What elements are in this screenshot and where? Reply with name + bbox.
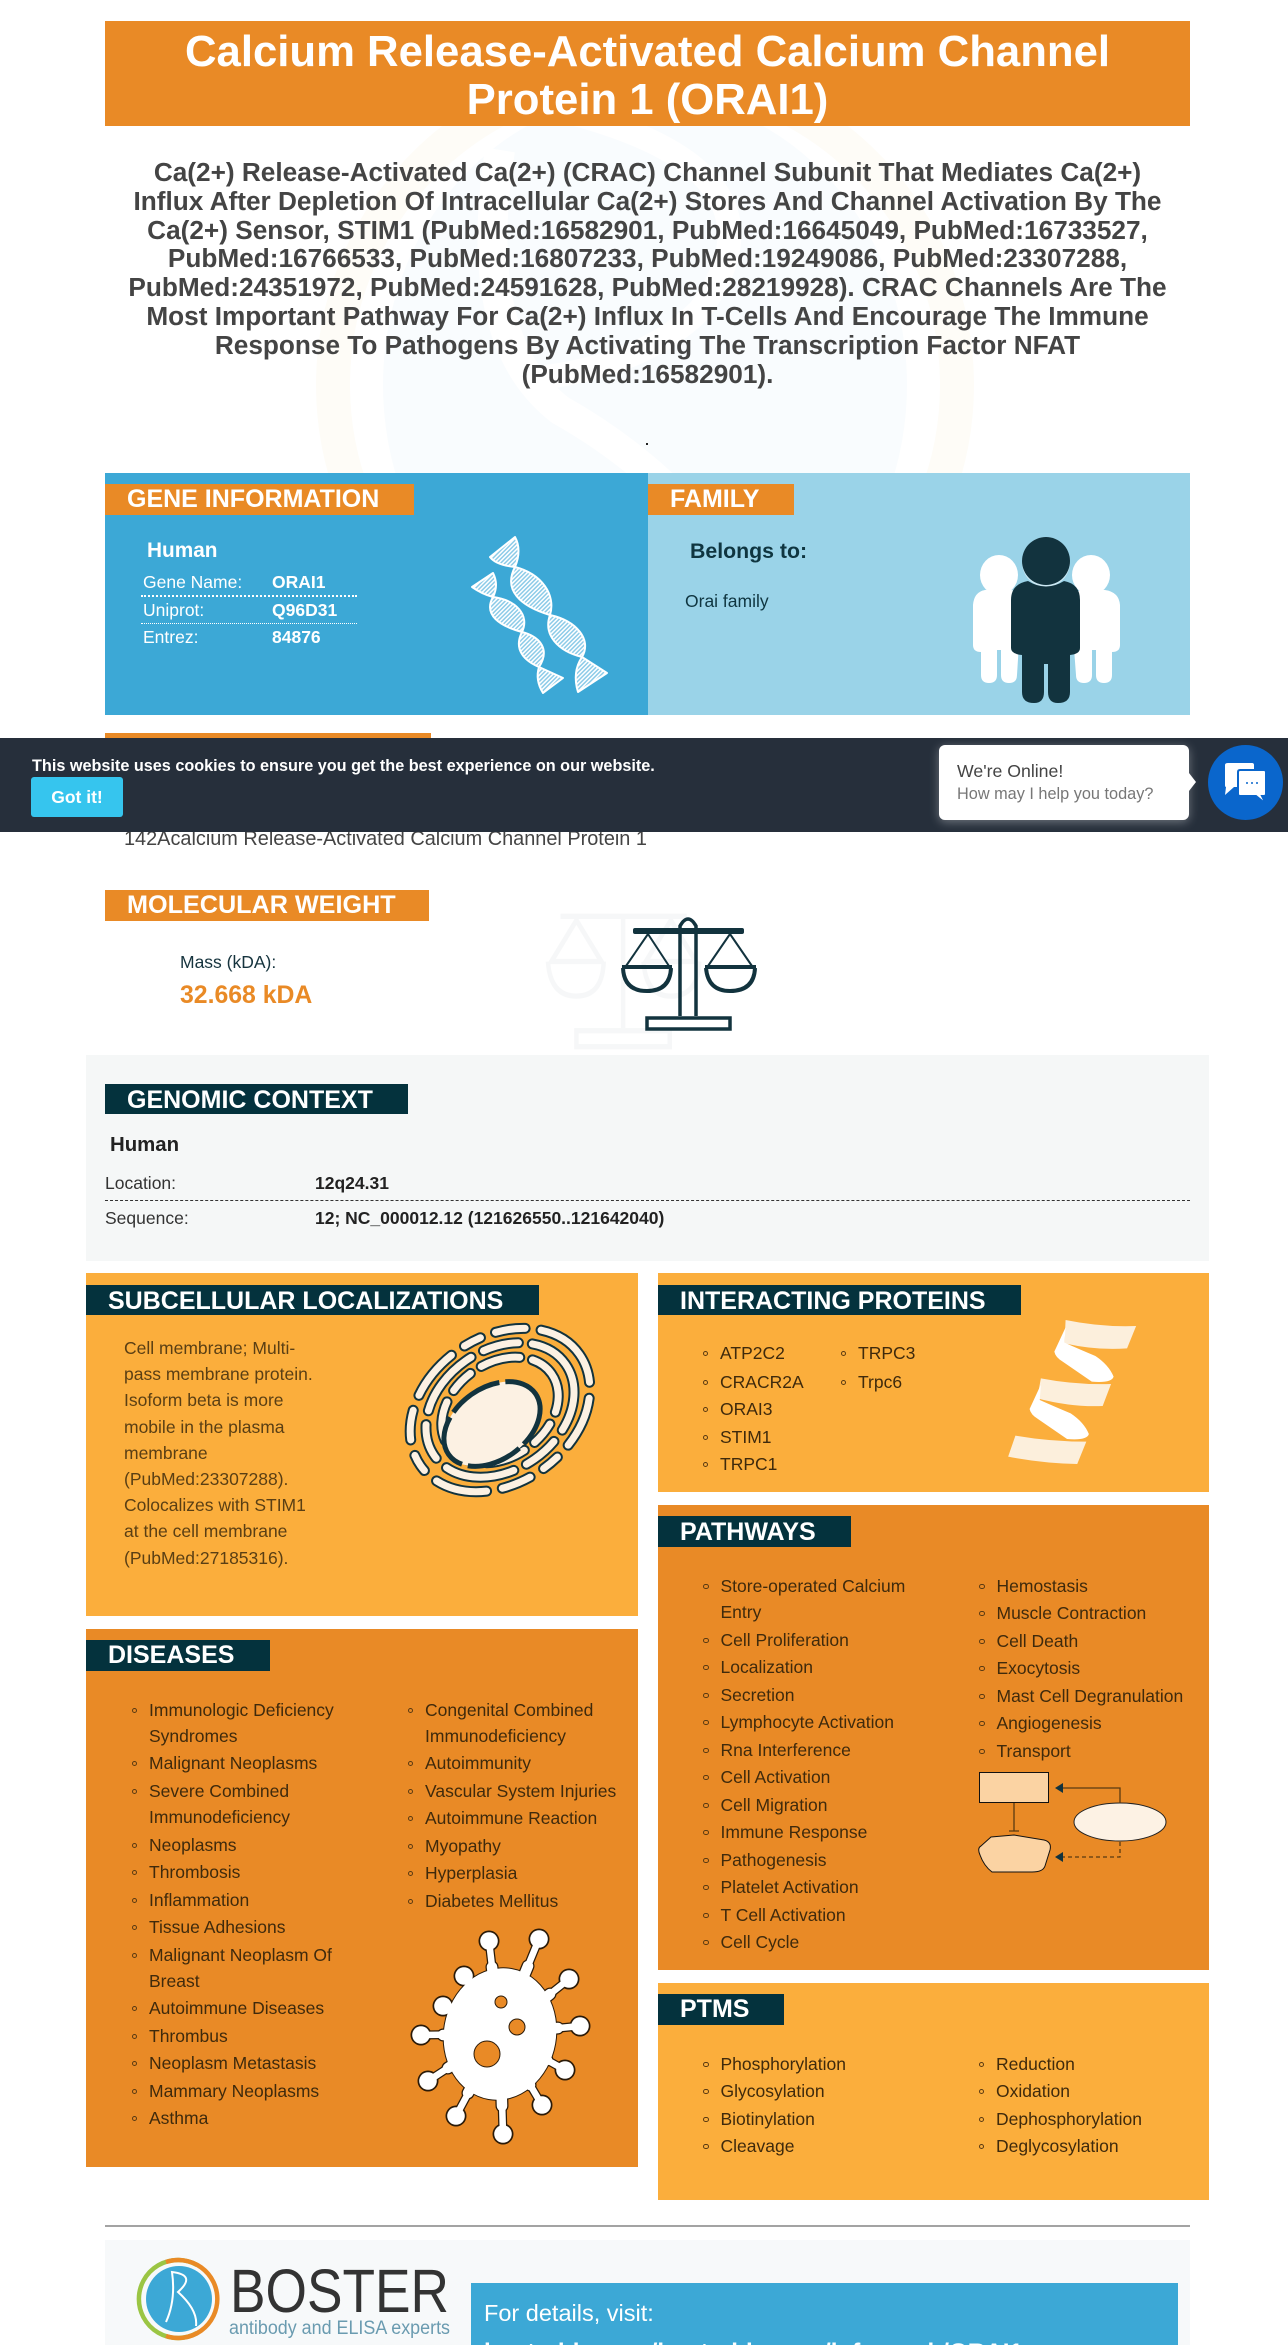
list column 1: Asthma <box>149 2108 208 2128</box>
list column 2: Autoimmune Reaction <box>425 1808 597 1828</box>
list column 2: Cell Death <box>996 1631 1078 1651</box>
list column 2: Oxidation <box>996 2081 1070 2101</box>
uniprot row: Q96D31 <box>272 600 337 620</box>
cookie bar <box>0 738 1288 832</box>
heading: gene information: GENE INFORMATION <box>127 485 379 513</box>
panel: gene information <box>105 473 648 715</box>
list column 1: Cell Cycle <box>720 1932 799 1952</box>
panel: interacting proteins <box>658 1273 1209 1492</box>
pathway diagram <box>978 1772 1166 1872</box>
list column 2 <box>408 1700 616 1911</box>
Boster logo: BOSTER <box>230 2257 449 2325</box>
list column 1: STIM1 <box>720 1427 772 1447</box>
call to action <box>471 2283 1178 2345</box>
gene name row: ORAI1 <box>272 572 325 592</box>
entrez row <box>143 627 321 647</box>
icon: group of people <box>973 537 1120 703</box>
uniprot row <box>143 600 337 620</box>
icon: protein ribbon <box>1008 1320 1136 1464</box>
title banner: Protein 1 (ORAI1) <box>467 74 828 124</box>
icon: balance scale <box>621 917 757 1031</box>
panel: diseases <box>86 1629 638 2167</box>
location row <box>105 1173 389 1193</box>
list column 1: Immune Response <box>720 1822 867 1842</box>
heading: PTMs <box>658 1994 784 2025</box>
description text: Influx After Depletion Of Intracellular Ca(2+) Stores And Channel Activation By The <box>133 186 1162 216</box>
footer divider <box>105 2225 1190 2227</box>
list column 1: Autoimmune Diseases <box>149 1998 324 2018</box>
list column 1: T Cell Activation <box>720 1905 846 1925</box>
belongs to label: Belongs to: <box>690 539 807 563</box>
localization text: (PubMed:23307288). <box>124 1469 288 1489</box>
list column 1: Biotinylation <box>720 2109 815 2129</box>
list column 2 <box>979 1576 1183 1761</box>
localization text <box>124 1338 313 1568</box>
list column 2: Trpc6 <box>858 1372 902 1392</box>
list column 1: Platelet Activation <box>720 1877 859 1897</box>
location row: 12q24.31 <box>315 1173 389 1193</box>
list column 1: Cell Activation <box>720 1767 830 1787</box>
list column 2: Deglycosylation <box>996 2136 1119 2156</box>
list column 1: ORAI3 <box>720 1399 773 1419</box>
localization text: Cell membrane; Multi- <box>124 1338 295 1358</box>
list column 1: Tissue Adhesions <box>149 1917 286 1937</box>
list column 2 <box>841 1343 915 1392</box>
list column 1: Breast <box>149 1971 200 1991</box>
heading: PTMs: PTMS <box>680 1995 749 2023</box>
heading: genomic context: GENOMIC CONTEXT <box>127 1086 373 1114</box>
localization text: Isoform beta is more <box>124 1390 284 1410</box>
description text <box>128 157 1167 389</box>
icon: faint scale watermark <box>546 914 702 1049</box>
icon: virus <box>410 1928 590 2144</box>
icon: chat button <box>1208 745 1283 820</box>
mass label: Mass (kDA): <box>180 952 276 972</box>
background watermark logo <box>300 110 1000 710</box>
heading: interacting proteins: INTERACTING PROTEINS <box>680 1287 986 1315</box>
description text: PubMed:24351972, PubMed:24591628, PubMed:28219928). CRAC Channels Are The <box>128 272 1167 302</box>
details label: For details, visit: <box>484 2300 654 2326</box>
list column 1: Store-operated Calcium <box>720 1576 905 1596</box>
list column 1: Inflammation <box>149 1890 249 1910</box>
list column 1: Severe Combined <box>149 1781 289 1801</box>
family name: Orai family <box>685 591 769 611</box>
panel: pathways <box>658 1505 1209 1970</box>
description text: Ca(2+) Sensor, STIM1 (PubMed:16582901, PubMed:16645049, PubMed:16733527, <box>147 215 1148 245</box>
list column 2 <box>979 2054 1142 2156</box>
list column 2: Congenital Combined <box>425 1700 593 1720</box>
list column 2: Immunodeficiency <box>425 1726 566 1746</box>
list column 2: Autoimmunity <box>425 1753 531 1773</box>
uniprot row: Uniprot: <box>143 600 204 620</box>
species label: Human <box>110 1134 179 1156</box>
list column 1: Pathogenesis <box>720 1850 827 1870</box>
list column 1: Lymphocyte Activation <box>720 1712 894 1732</box>
heading: subcellular localizations: SUBCELLULAR LOCALIZATIONS <box>108 1287 503 1315</box>
cookie button: Got it! <box>51 787 103 807</box>
list column 1: TRPC1 <box>720 1454 777 1474</box>
list column 2: Myopathy <box>425 1836 501 1856</box>
localization text: membrane <box>124 1443 208 1463</box>
description text: Most Important Pathway For Ca(2+) Influx In T-Cells And Encourage The Immune <box>146 301 1149 331</box>
gene name row <box>143 572 325 592</box>
localization text: mobile in the plasma <box>124 1417 284 1437</box>
list column 2: Diabetes Mellitus <box>425 1891 558 1911</box>
chat bubble <box>939 745 1189 820</box>
list column 1 <box>703 1343 804 1474</box>
description text: (PubMed:16582901). <box>522 359 773 389</box>
list column 2: Transport <box>996 1741 1071 1761</box>
gene info table <box>141 572 357 647</box>
cookie message: This website uses cookies to ensure you get the best experience on our website. <box>32 757 655 775</box>
location row: Location: <box>105 1173 176 1193</box>
list column 2: Hyperplasia <box>425 1863 517 1883</box>
list column 1: Cleavage <box>720 2136 794 2156</box>
list column 1 <box>132 1700 334 2128</box>
sequence row <box>105 1208 664 1228</box>
localization text: pass membrane protein. <box>124 1364 313 1384</box>
list column 2: Muscle Contraction <box>996 1603 1146 1623</box>
heading: molecular weight: MOLECULAR WEIGHT <box>127 891 396 919</box>
entrez row: 84876 <box>272 627 321 647</box>
list column 1: Secretion <box>720 1685 794 1705</box>
list column 2: Vascular System Injuries <box>425 1781 616 1801</box>
chat greeting: We're Online! <box>957 761 1063 781</box>
list column 1: Immunologic Deficiency <box>149 1700 334 1720</box>
sequence row: Sequence: <box>105 1208 189 1228</box>
gene name row: Gene Name: <box>143 572 242 592</box>
description text: Ca(2+) Release-Activated Ca(2+) (CRAC) Channel Subunit That Mediates Ca(2+) <box>154 157 1141 187</box>
title banner <box>105 21 1190 126</box>
entrez row: Entrez: <box>143 627 198 647</box>
list column 1: Mammary Neoplasms <box>149 2081 319 2101</box>
list column 2: Mast Cell Degranulation <box>996 1686 1183 1706</box>
panel: PTMs <box>658 1983 1209 2200</box>
localization text: Colocalizes with STIM1 <box>124 1495 306 1515</box>
heading: diseases: DISEASES <box>108 1641 234 1669</box>
panel: subcellular localizations <box>86 1273 638 1616</box>
mass value: 32.668 kDA <box>180 982 312 1009</box>
heading: diseases <box>86 1640 270 1671</box>
heading: family: FAMILY <box>670 485 759 513</box>
list column 2: Reduction <box>996 2054 1075 2074</box>
list column 1 <box>703 1576 905 1952</box>
icon: cell with endoplasmic reticulum <box>404 1322 595 1498</box>
icon: DNA helix <box>471 536 608 694</box>
list column 1: Syndromes <box>149 1726 238 1746</box>
list column 1: Neoplasm Metastasis <box>149 2053 316 2073</box>
list column 2: Hemostasis <box>996 1576 1088 1596</box>
localization text: (PubMed:27185316). <box>124 1548 288 1568</box>
title banner: Calcium Release-Activated Calcium Channel <box>185 26 1110 76</box>
list column 1: ATP2C2 <box>720 1343 785 1363</box>
list column 1: Malignant Neoplasms <box>149 1753 317 1773</box>
bubble pointer <box>1189 773 1196 791</box>
dot <box>646 443 648 445</box>
list column 1: Neoplasms <box>149 1835 237 1855</box>
list column 1: Phosphorylation <box>720 2054 846 2074</box>
list column 1: Cell Proliferation <box>720 1630 849 1650</box>
heading: pathways: PATHWAYS <box>680 1518 816 1546</box>
panel: family <box>648 473 1190 715</box>
list column 1: Immunodeficiency <box>149 1807 290 1827</box>
list column 1: Malignant Neoplasm Of <box>149 1945 332 1965</box>
list column 2: Angiogenesis <box>996 1713 1102 1733</box>
partially hidden orange heading <box>105 733 431 743</box>
description text: Response To Pathogens By Activating The Transcription Factor NFAT <box>215 330 1080 360</box>
sequence text: 142Acalcium Release-Activated Calcium Channel Protein 1 <box>124 828 647 850</box>
list column 1: Rna Interference <box>720 1740 851 1760</box>
list column 1: Glycosylation <box>720 2081 825 2101</box>
footer panel <box>105 2240 1190 2345</box>
Boster logo <box>136 2257 450 2340</box>
list column 1: Entry <box>720 1602 761 1622</box>
description text: PubMed:16766533, PubMed:16807233, PubMed:19249086, PubMed:23307288, <box>168 243 1127 273</box>
list column 1: Cell Migration <box>720 1795 827 1815</box>
heading: pathways <box>658 1516 851 1547</box>
list column 1: Localization <box>720 1657 813 1677</box>
sequence row: 12; NC_000012.12 (121626550..121642040) <box>315 1208 664 1228</box>
list column 1: Thrombosis <box>149 1862 240 1882</box>
cookie button <box>31 777 123 817</box>
list column 1 <box>703 2054 846 2156</box>
list column 1: Thrombus <box>149 2026 228 2046</box>
heading: family <box>648 484 794 515</box>
list column 2: Dephosphorylation <box>996 2109 1142 2129</box>
localization text: at the cell membrane <box>124 1521 287 1541</box>
Boster logo: antibody and ELISA experts <box>229 2318 450 2339</box>
chat prompt: How may I help you today? <box>957 785 1153 803</box>
species label: Human <box>147 539 217 562</box>
panel: genomic context <box>86 1055 1209 1261</box>
list column 2: Exocytosis <box>996 1658 1080 1678</box>
list column 1: CRACR2A <box>720 1372 804 1392</box>
list column 2: TRPC3 <box>858 1343 915 1363</box>
